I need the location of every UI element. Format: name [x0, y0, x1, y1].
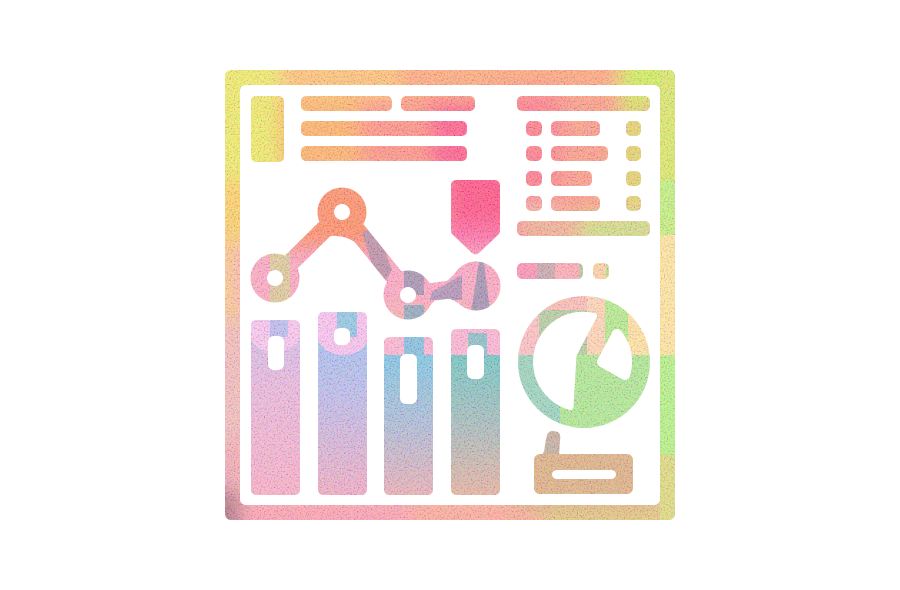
bar chart: [251, 312, 500, 495]
icon: left tall block: [251, 96, 284, 162]
tag label: [534, 431, 633, 494]
icon: location marker: [451, 180, 500, 254]
panel: list: [517, 96, 650, 236]
line chart: [250, 188, 500, 320]
pie chart: [518, 296, 650, 428]
text lines: [301, 96, 475, 161]
list footer bar: [517, 221, 650, 236]
outer frame: [225, 70, 675, 520]
list title bar: [517, 96, 650, 111]
panel: header block: [251, 96, 475, 162]
list rows: [526, 121, 641, 211]
legend bars: [517, 263, 609, 279]
